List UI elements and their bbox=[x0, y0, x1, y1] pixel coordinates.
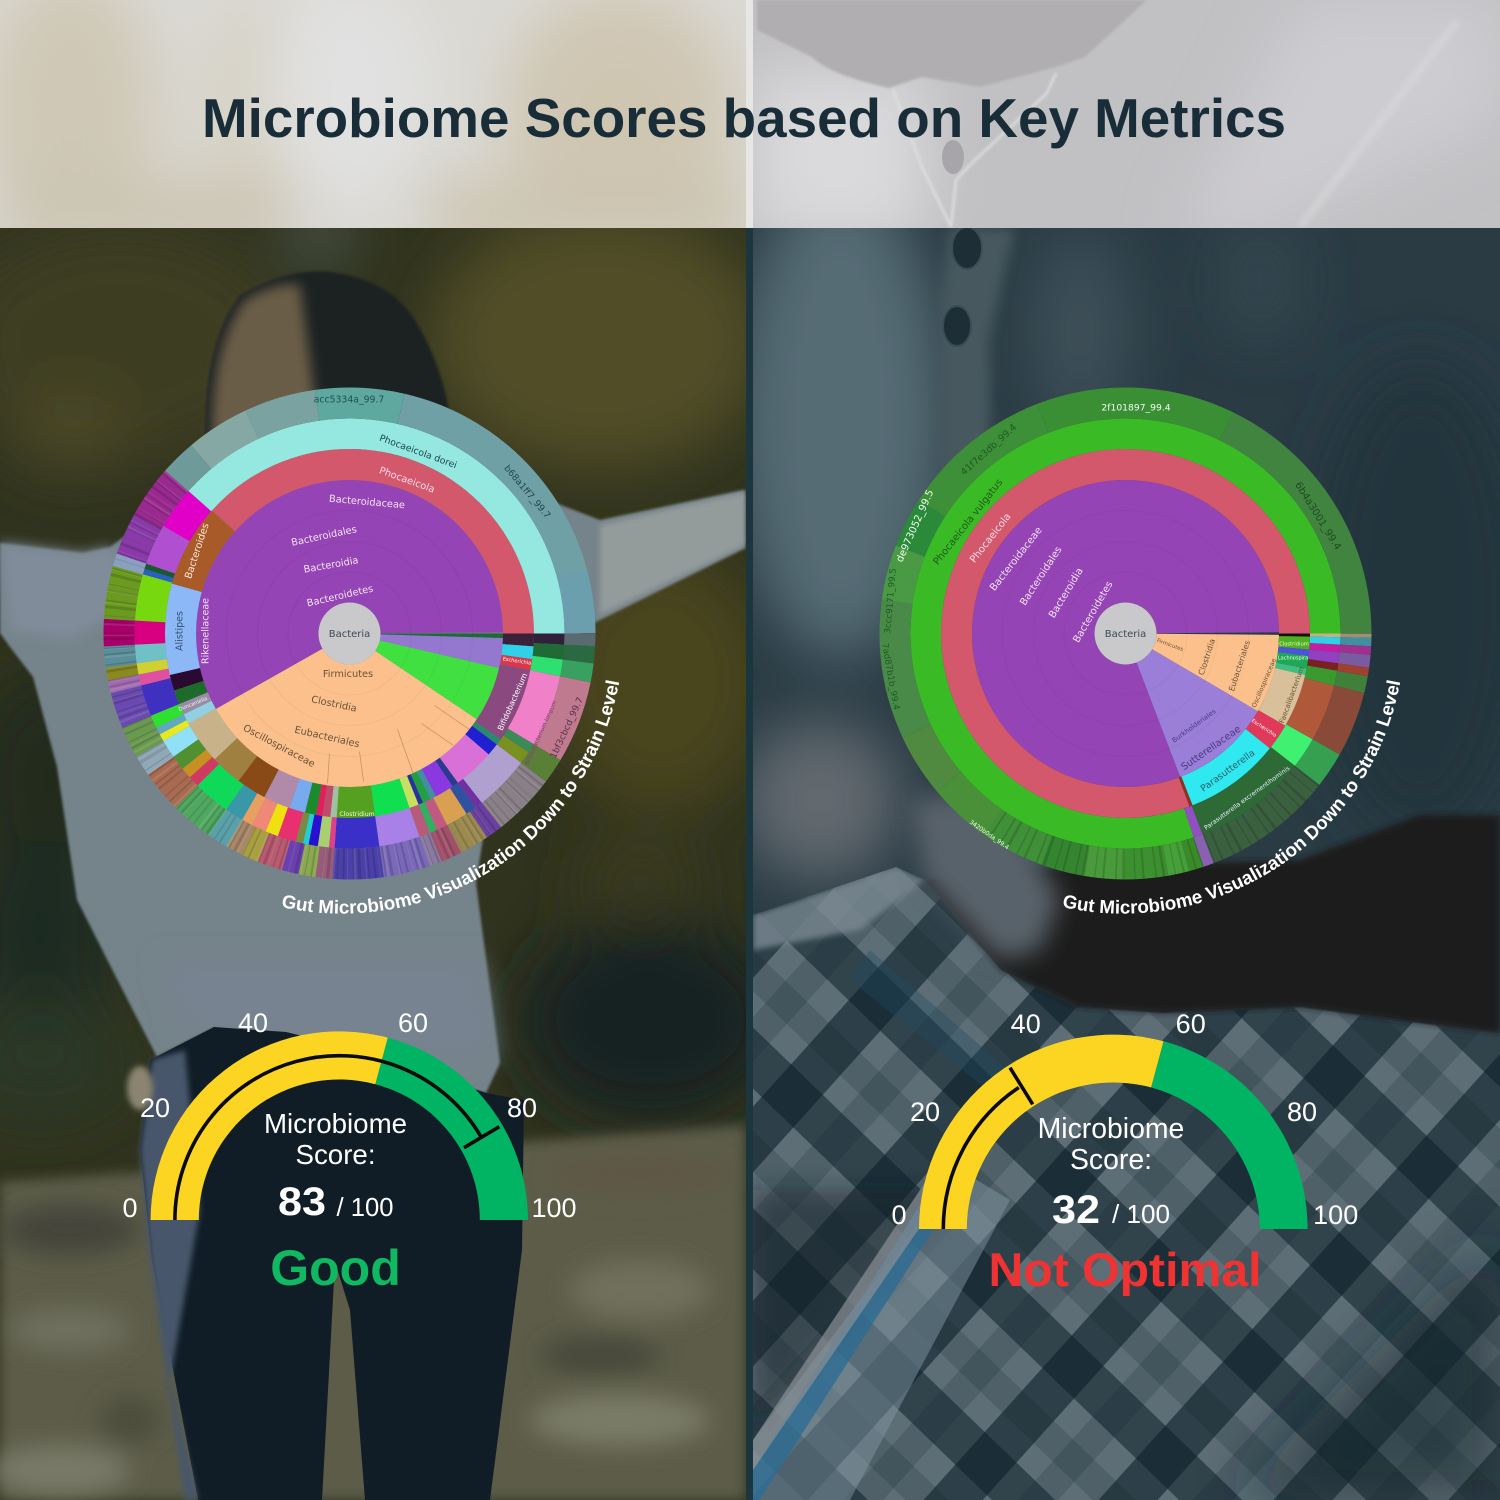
centre node bbox=[318, 602, 380, 664]
scale labels: 80 bbox=[507, 1093, 537, 1123]
centre node bbox=[1094, 602, 1156, 664]
taxon labels bbox=[879, 402, 1343, 851]
status: Good: Good bbox=[270, 1240, 401, 1296]
taxon labels: Clostridium bbox=[1279, 642, 1309, 648]
taxon labels bbox=[174, 394, 586, 818]
scale labels: 20 bbox=[140, 1093, 170, 1123]
centre node: Bacteria bbox=[1105, 629, 1146, 640]
shirt and arms bbox=[0, 470, 745, 1093]
score needle bbox=[943, 1068, 1033, 1229]
placket and buttons bbox=[941, 228, 1015, 500]
taxon labels: Firmicutes bbox=[323, 669, 373, 680]
taxon labels: 3420b0da_99.4 bbox=[968, 819, 1010, 851]
taxon labels: Escherichia bbox=[1250, 718, 1277, 739]
gauge arc: yellow band bbox=[919, 1035, 1164, 1229]
gauge arc: green band bbox=[1151, 1041, 1308, 1229]
scale labels: 40 bbox=[1011, 1009, 1041, 1039]
score text: Score: bbox=[295, 1139, 376, 1170]
gauge: right microbiome score 32 bbox=[891, 1009, 1358, 1296]
taxon labels: 1bf3cbcd_99.7 bbox=[549, 696, 586, 760]
taxon labels: Phocaeicola vulgatus bbox=[932, 477, 1005, 567]
taxon labels: Phocaeicola dorei bbox=[378, 433, 458, 471]
scale labels: 100 bbox=[1313, 1200, 1358, 1230]
chart: right sunburst, not optimal gut microbiome bbox=[879, 402, 1356, 864]
taxon labels: Clostridia bbox=[1197, 638, 1217, 676]
taxon labels: Rikenellaceae bbox=[200, 598, 212, 664]
taxon labels: Bacteroidia bbox=[303, 555, 359, 576]
taxon labels: Clostridia bbox=[310, 694, 358, 715]
hand bbox=[910, 790, 1060, 960]
photo: left top band, hazy trees bbox=[0, 0, 750, 250]
taxon labels: Escherichia bbox=[502, 656, 532, 667]
taxon labels: Alistipes bbox=[174, 611, 186, 651]
taxon labels: Duncaniella bbox=[178, 696, 208, 713]
taxon labels: 3ccc9171_99.5 bbox=[883, 568, 899, 634]
taxon labels: 7ad87b1b_99.4 bbox=[879, 642, 901, 711]
taxon labels: Parasutterella bbox=[1199, 748, 1257, 794]
ring: phylum to family bbox=[226, 510, 472, 784]
taxon labels: Bacteroidales bbox=[290, 524, 358, 549]
scale labels: 80 bbox=[1287, 1097, 1317, 1127]
scale labels bbox=[891, 1009, 1358, 1230]
scale labels: 20 bbox=[910, 1097, 940, 1127]
score text bbox=[1038, 1113, 1184, 1232]
ring: genus bbox=[180, 464, 518, 802]
gauge arc: green band bbox=[375, 1038, 528, 1220]
jeans bbox=[140, 1027, 524, 1500]
scale labels: 40 bbox=[238, 1008, 268, 1038]
score text: Score: bbox=[1070, 1144, 1152, 1176]
score text: Microbiome bbox=[1038, 1113, 1184, 1145]
taxon labels: 6b4a3001_99.4 bbox=[1292, 480, 1343, 552]
ring: species bbox=[926, 434, 1325, 833]
taxon labels: Oscillospiraceae bbox=[241, 723, 317, 770]
taxon labels: Bacteroidales bbox=[1018, 545, 1065, 608]
ring: species bbox=[150, 434, 549, 833]
status: Not Optimal: Not Optimal bbox=[988, 1243, 1262, 1296]
ring: strain bbox=[119, 403, 580, 864]
photo: right top band, neck and collar bbox=[753, 0, 1500, 240]
forest backdrop bbox=[0, 210, 780, 1120]
gauge arc: yellow band bbox=[151, 1031, 388, 1220]
score text: / 100 bbox=[336, 1192, 394, 1222]
taxon labels: Clostridium bbox=[339, 811, 375, 818]
taxon labels: de973052_99.5 bbox=[895, 488, 936, 564]
taxon labels: Bifidobacterium bbox=[496, 672, 529, 732]
photo: left lower, woman with outstretched arms in a forest bbox=[0, 210, 780, 1500]
score text: 83 bbox=[278, 1180, 326, 1224]
taxon labels: Burkholderiales bbox=[1171, 707, 1218, 745]
taxon labels: Phocaeicola bbox=[378, 465, 436, 496]
hair bbox=[205, 271, 452, 480]
divider highlight, top band bbox=[746, 0, 753, 228]
centre node: Bacteria bbox=[329, 629, 370, 640]
button bbox=[942, 140, 964, 174]
ring: genus bbox=[956, 464, 1294, 802]
gauge: left microbiome score 83 bbox=[122, 1008, 577, 1296]
scale labels: 0 bbox=[891, 1200, 907, 1230]
taxon labels: Lachnospira bbox=[1278, 656, 1308, 662]
taxon labels: acc5334a_99.7 bbox=[314, 394, 384, 406]
collar placket bbox=[893, 73, 1056, 227]
score text: 32 bbox=[1052, 1188, 1100, 1232]
shirt shading bbox=[735, 180, 1500, 880]
score needle bbox=[175, 1056, 499, 1220]
taxon labels: 41f7e3db_99.4 bbox=[959, 422, 1019, 478]
ground bbox=[0, 1125, 746, 1500]
taxon labels: Sutterellaceae bbox=[1179, 724, 1243, 773]
scale labels: 100 bbox=[531, 1193, 577, 1223]
score text bbox=[264, 1108, 407, 1224]
taxon labels: 2f101897_99.4 bbox=[1101, 402, 1171, 414]
photo: right lower, man holding his stomach bbox=[735, 180, 1500, 1500]
taxon labels: Eubacteriales bbox=[1227, 639, 1252, 692]
score text: / 100 bbox=[1112, 1199, 1170, 1229]
taxon labels: Bifidobacterium longum bbox=[525, 700, 559, 766]
ring: strain bbox=[895, 403, 1356, 864]
pyjama plaid bbox=[753, 860, 1500, 1500]
taxon labels: Bacteroidetes bbox=[1071, 580, 1115, 645]
caption: left curved sunburst caption: Gut Microbiome Visualization Down to Strain Level bbox=[282, 680, 620, 914]
scale labels: 60 bbox=[398, 1008, 428, 1038]
title: Microbiome Scores based on Key Metrics bbox=[202, 88, 1286, 149]
score text: Microbiome bbox=[264, 1108, 407, 1139]
taxon labels: Bacteroidia bbox=[1047, 566, 1086, 620]
taxon labels: Oscillospiraceae bbox=[1250, 657, 1278, 709]
taxon labels: Eubacteriales bbox=[293, 725, 361, 750]
taxon labels: Firmicutes bbox=[1156, 638, 1184, 653]
taxon labels: Parasutterella excrementihominis bbox=[1203, 765, 1291, 832]
scale labels: 0 bbox=[122, 1193, 138, 1223]
taxon labels: b68a1ff7_99.7 bbox=[501, 463, 553, 521]
ring: phylum to family bbox=[1002, 510, 1248, 756]
chart: left sunburst, good gut microbiome bbox=[119, 394, 586, 864]
scale labels bbox=[122, 1008, 577, 1223]
taxon labels: Bacteroidaceae bbox=[329, 494, 405, 511]
forearm bbox=[925, 815, 1500, 1033]
taxon labels: Bacteroidetes bbox=[306, 584, 374, 609]
taxon labels: Bacteroidaceae bbox=[988, 525, 1045, 593]
neck bbox=[757, 0, 1147, 88]
scale labels: 60 bbox=[1176, 1009, 1206, 1039]
caption: right curved sunburst caption: Gut Microbiome Visualization Down to Strain Level bbox=[1064, 680, 1400, 914]
taxon labels: Phocaeicola bbox=[968, 511, 1014, 565]
taxon labels: Faecalibacterium bbox=[1278, 665, 1306, 724]
taxon labels: Bacteroides bbox=[183, 522, 212, 580]
